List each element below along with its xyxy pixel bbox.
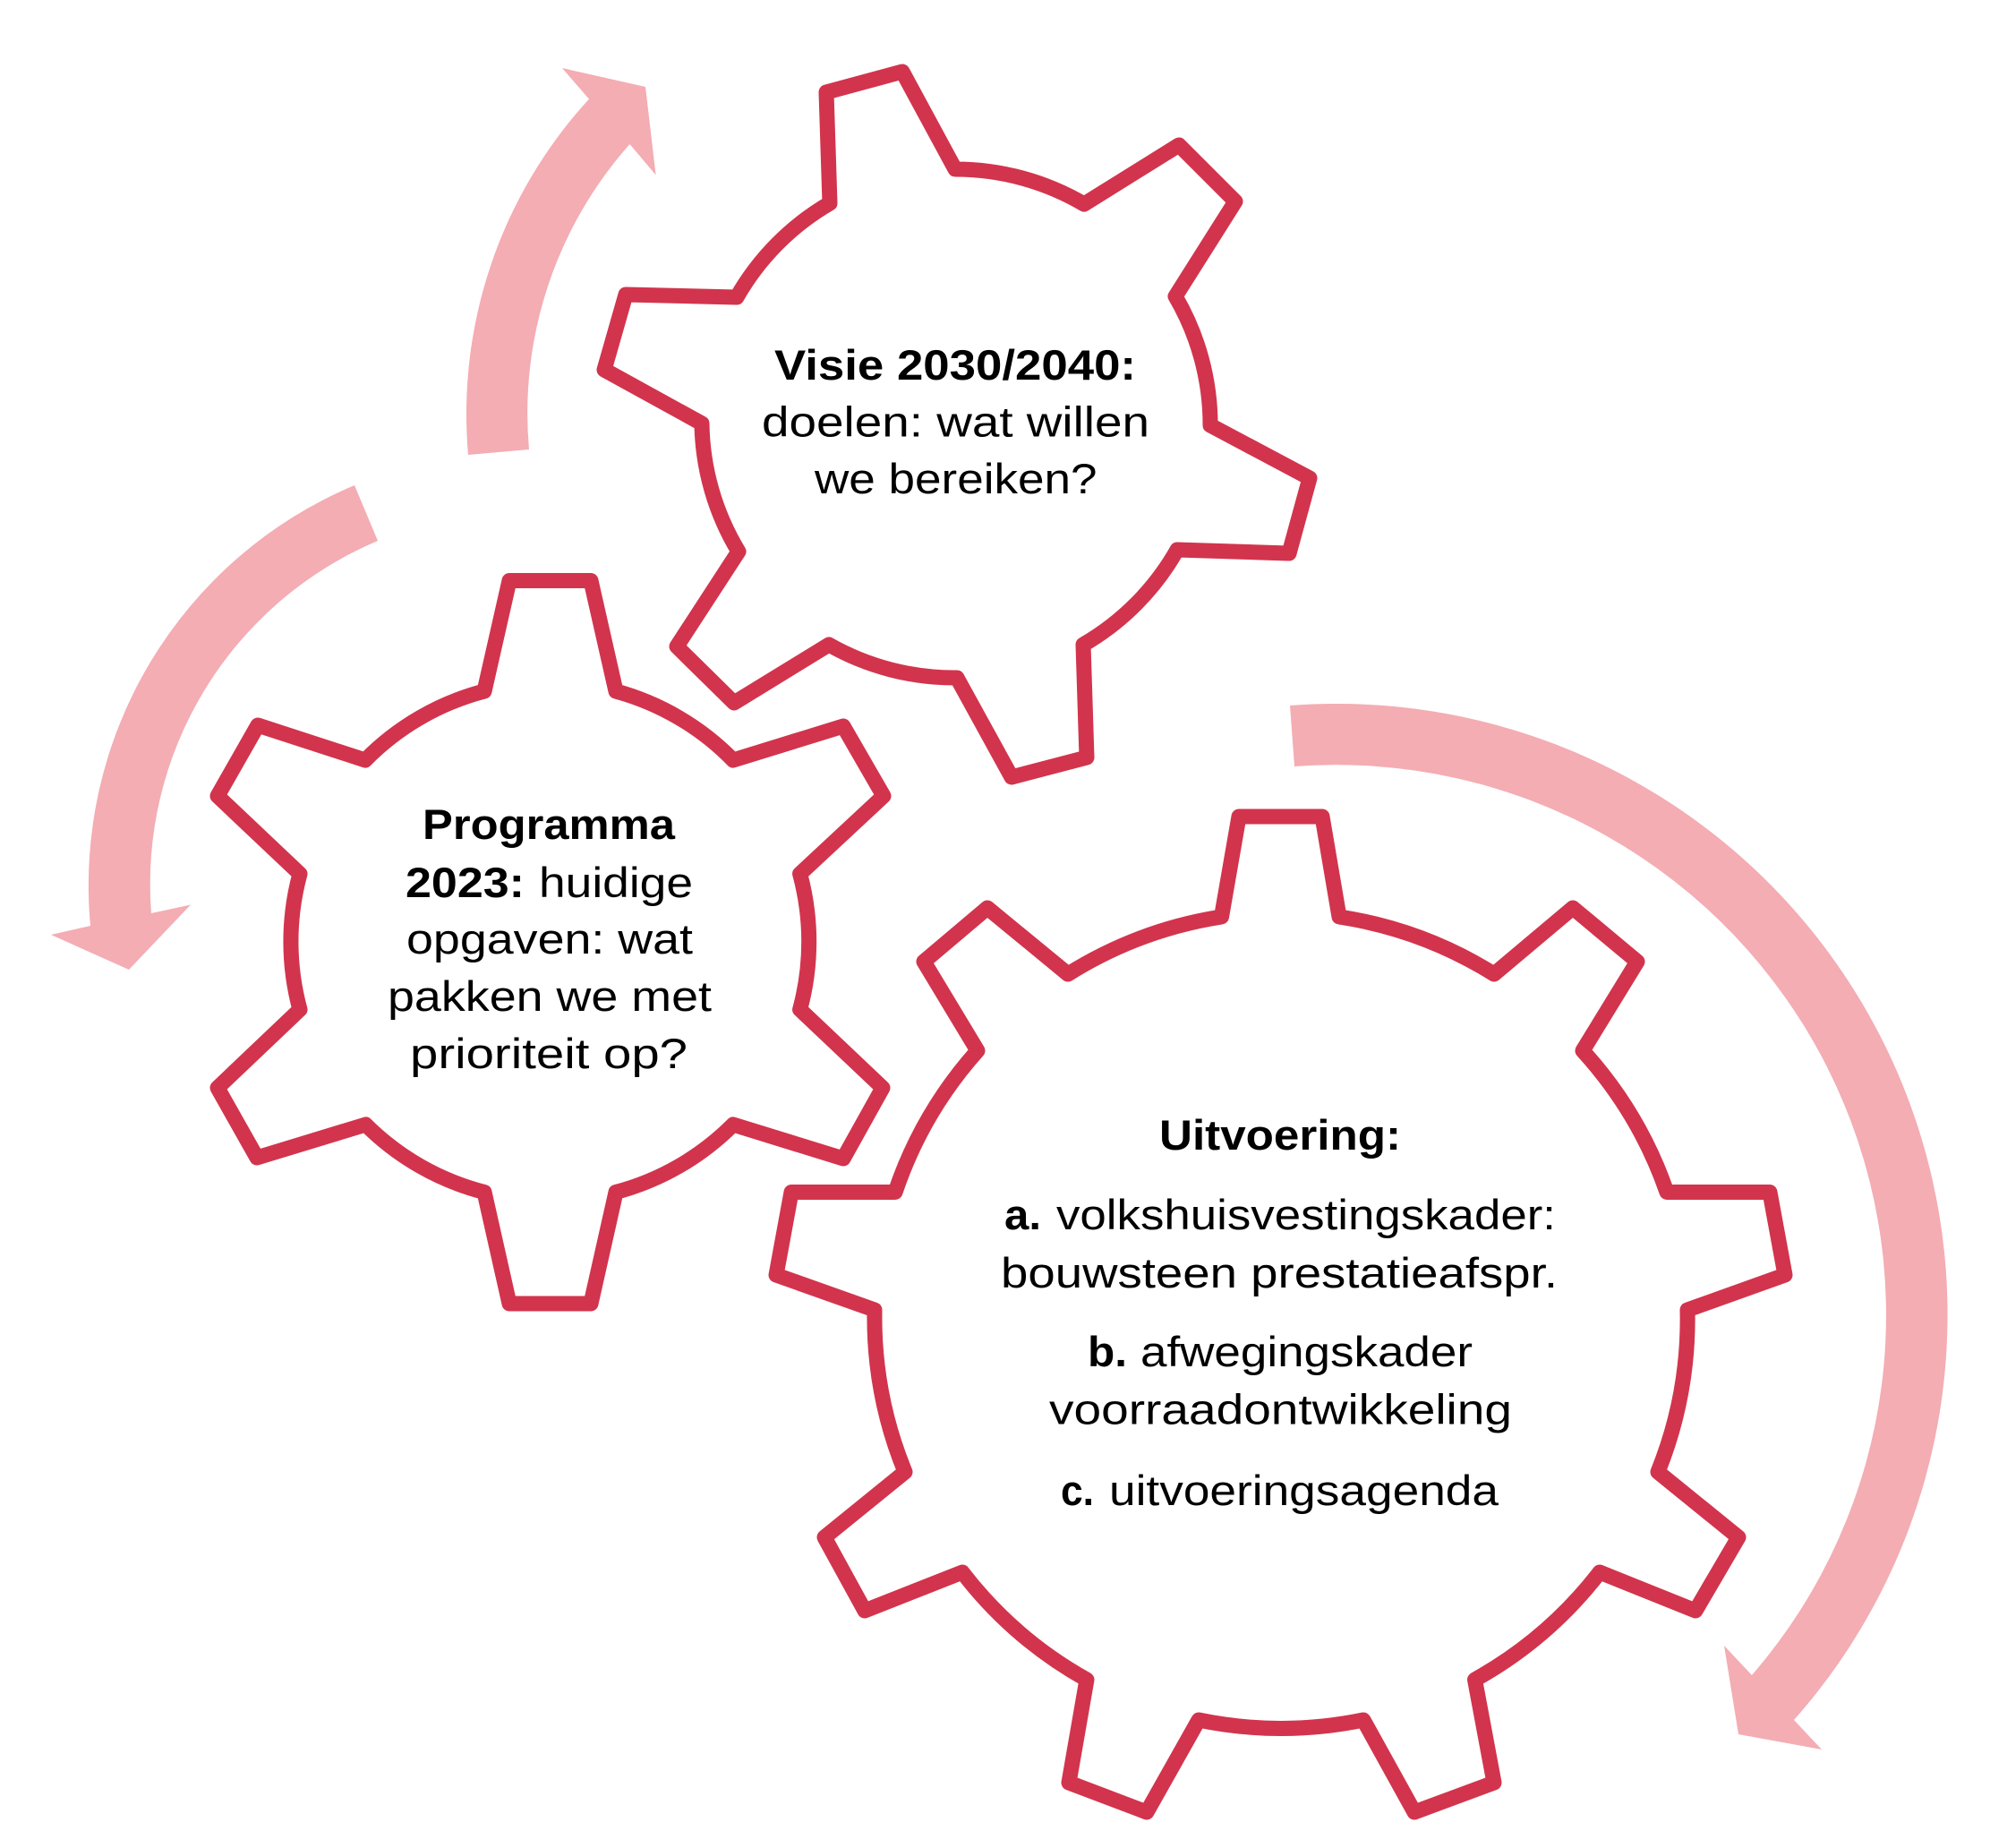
text: uitvoering: volkshuisvestingskader: [1056,1191,1556,1238]
gear outline: uitvoering [776,817,1785,1812]
text: uitvoering: b. [1088,1328,1127,1375]
text: uitvoering: c. [1061,1467,1094,1514]
text: visie: doelen: wat willen [762,398,1149,446]
arrow: large arc right around uitvoering [1290,704,1948,1750]
text: uitvoering: bouwsteen prestatieafspr. [1001,1249,1558,1296]
text: uitvoering: afwegingskader [1140,1328,1473,1375]
text: programma: prioriteit op? [410,1030,688,1077]
gear outline: programma [218,580,884,1304]
panel: gear Uitvoering [776,817,1785,1812]
text: uitvoering: Uitvoering: [1159,1111,1401,1159]
text: programma: opgaven: wat [406,915,693,962]
text: uitvoering: uitvoeringsagenda [1109,1467,1499,1514]
panel: gear Visie [604,72,1310,777]
text: programma: Programma [423,800,676,848]
text: uitvoering [1001,1111,1558,1514]
gear outline: visie [604,72,1310,777]
arrow: from programma up to visie [466,68,656,455]
text: uitvoering: a. [1004,1191,1041,1238]
text: programma: huidige [539,859,693,906]
text: visie: we bereiken? [814,455,1097,502]
arrow: from visie down to programma [51,485,378,970]
text: uitvoering: voorraadontwikkeling [1049,1386,1512,1433]
text: programma [388,800,712,1077]
text: programma: pakken we met [388,972,712,1020]
text: visie: Visie 2030/2040: [774,341,1136,389]
text: visie [762,341,1149,502]
panel: gear Programma [218,580,884,1304]
text: programma: 2023: [406,859,525,906]
